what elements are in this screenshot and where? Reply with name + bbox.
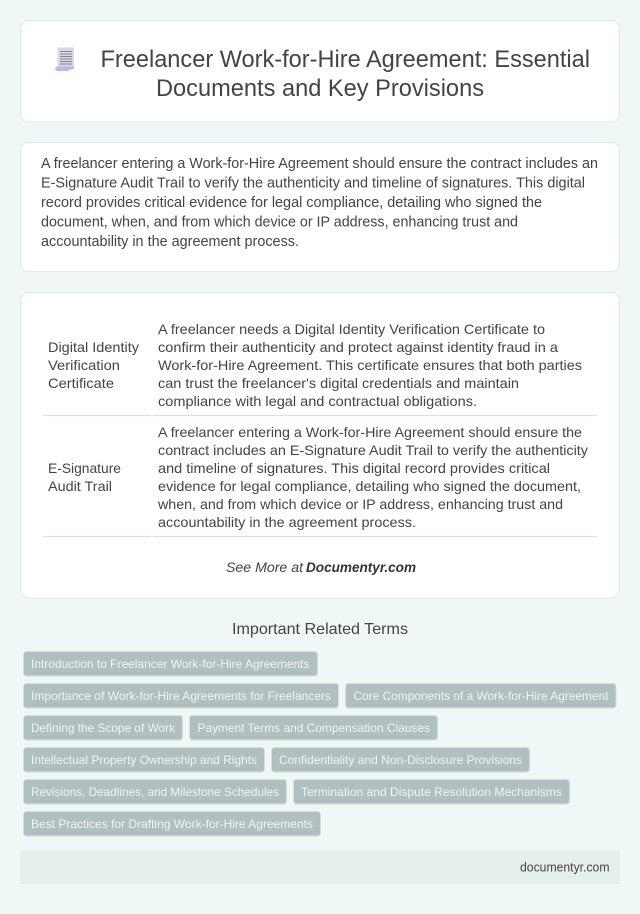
row description: Work-for-Hire Agreement. This certificate ensures that both parties <box>158 357 582 373</box>
summary text: E-Signature Audit Trail to verify the authenticity and timeline of signatures. This digital <box>41 176 585 192</box>
tag: Intellectual Property Ownership and Rights <box>31 753 257 767</box>
row label: Certificate <box>48 375 114 391</box>
row description: compliance with legal and contractual obligations. <box>158 393 477 409</box>
footer bar <box>20 850 620 884</box>
tag <box>24 716 182 740</box>
row: Digital Identity Verification Certificate <box>48 321 582 409</box>
row label: E-Signature <box>48 460 121 476</box>
footer brand: documentyr.com <box>520 860 610 874</box>
row label: Verification <box>48 357 120 373</box>
panel: header <box>20 20 620 122</box>
tag <box>24 780 286 804</box>
row description <box>157 424 588 530</box>
tag: Importance of Work-for-Hire Agreements for Freelancers <box>31 689 331 703</box>
see more link <box>226 559 416 575</box>
tag <box>24 812 320 836</box>
summary text: accountability in the agreement process. <box>41 234 299 250</box>
panel: documents table <box>20 292 620 598</box>
see more link: See More at <box>226 559 304 575</box>
row description: accountability in the agreement process. <box>158 514 416 530</box>
tag: Core Components of a Work-for-Hire Agreement <box>354 689 609 703</box>
see more link: Documentyr.com <box>306 559 416 575</box>
tag <box>24 748 264 772</box>
title: Documents and Key Provisions <box>156 75 484 102</box>
row description: A freelancer needs a Digital Identity Verification Certificate to <box>158 321 545 337</box>
tag <box>190 716 438 740</box>
tag <box>272 748 530 772</box>
heading: important related terms: Important Related Terms <box>232 621 408 638</box>
title: Freelancer Work-for-Hire Agreement: Essential <box>100 46 590 73</box>
row: E-Signature Audit Trail <box>48 424 588 530</box>
tag: Confidentiality and Non-Disclosure Provisions <box>279 753 522 767</box>
summary text <box>41 156 598 250</box>
row label <box>48 460 121 494</box>
row label <box>48 339 139 391</box>
row label: Audit Trail <box>48 478 112 494</box>
tag <box>346 684 616 708</box>
title <box>100 46 590 102</box>
row description: contract includes an E-Signature Audit Trail to verify the authenticity <box>158 442 588 458</box>
panel: summary paragraph <box>20 142 620 272</box>
row description: evidence for legal compliance, detailing who signed the document, <box>158 478 581 494</box>
tag <box>24 652 318 676</box>
tag: Revisions, Deadlines, and Milestone Schedules <box>31 785 279 799</box>
summary text: document, when, and from which device or IP address, enhancing trust and <box>41 214 518 230</box>
tag: Introduction to Freelancer Work-for-Hire Agreements <box>31 657 310 671</box>
tag <box>294 780 570 804</box>
tag: Best Practices for Drafting Work-for-Hire Agreements <box>31 817 313 831</box>
icon: document scroll <box>55 48 74 71</box>
row description: and timeline of signatures. This digital record provides critical <box>158 460 550 476</box>
row description: when, and from which device or IP address, enhancing trust and <box>157 496 563 512</box>
row label: Digital Identity <box>48 339 139 355</box>
related term tags <box>24 652 616 836</box>
summary text: record provides critical evidence for legal compliance, detailing who signed the <box>41 195 542 211</box>
row description: can trust the freelancer's digital credentials and maintain <box>158 375 519 391</box>
tag: Defining the Scope of Work <box>31 721 176 735</box>
tag <box>24 684 338 708</box>
row description: A freelancer entering a Work-for-Hire Agreement should ensure the <box>158 424 582 440</box>
row description: confirm their authenticity and protect against identity fraud in a <box>158 339 558 355</box>
summary text: A freelancer entering a Work-for-Hire Agreement should ensure the contract includes an <box>41 156 598 172</box>
tag: Payment Terms and Compensation Clauses <box>198 721 430 735</box>
tag: Termination and Dispute Resolution Mechanisms <box>301 785 562 799</box>
row description <box>158 321 582 409</box>
